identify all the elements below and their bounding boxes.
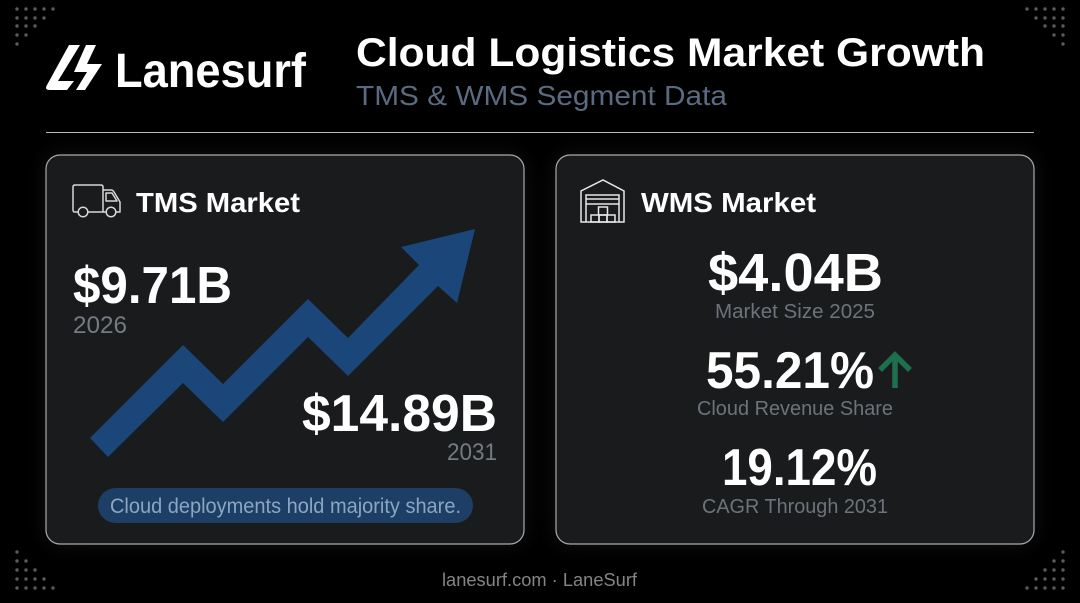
callout pill: Cloud deployments hold majority share.	[110, 495, 461, 518]
heading: WMS Market: WMS Market	[641, 187, 816, 218]
subtitle: TMS & WMS Segment Data	[356, 80, 727, 111]
icon: green up arrow	[880, 355, 910, 388]
callout pill	[98, 488, 473, 523]
stat: CAGR: 19.12%	[722, 439, 877, 497]
icon: Lanesurf mark	[46, 45, 102, 90]
logo wordmark: Lanesurf	[115, 45, 307, 98]
stat label: 2031: 2031	[447, 439, 497, 466]
decorative dots: bottom left	[15, 550, 55, 590]
decorative dots: bottom right	[1025, 550, 1065, 590]
stat: cloud revenue share: 55.21%	[706, 342, 874, 400]
panel: TMS Market	[46, 155, 524, 544]
stat label: cloud revenue share: Cloud Revenue Share	[697, 398, 893, 420]
title: Cloud Logistics Market Growth	[356, 31, 985, 75]
decorative dots: top left	[15, 7, 55, 46]
icon: warehouse	[581, 180, 624, 222]
decorative dots: top right	[1025, 7, 1065, 46]
stat: 2026 value: $9.71B	[73, 257, 232, 315]
icon: delivery truck	[73, 185, 120, 217]
header logo: Lanesurf	[46, 45, 307, 98]
stat: 2031 value: $14.89B	[302, 385, 497, 443]
stat: market size: $4.04B	[708, 243, 883, 303]
stat label: market size: Market Size 2025	[715, 301, 875, 323]
growth arrow chart	[90, 229, 475, 457]
heading: TMS Market: TMS Market	[136, 187, 300, 218]
panel: WMS Market	[556, 155, 1034, 544]
stat label: 2026: 2026	[73, 312, 127, 339]
footer: lanesurf.com · LaneSurf	[442, 570, 638, 590]
stat label: CAGR: CAGR Through 2031	[702, 496, 888, 518]
